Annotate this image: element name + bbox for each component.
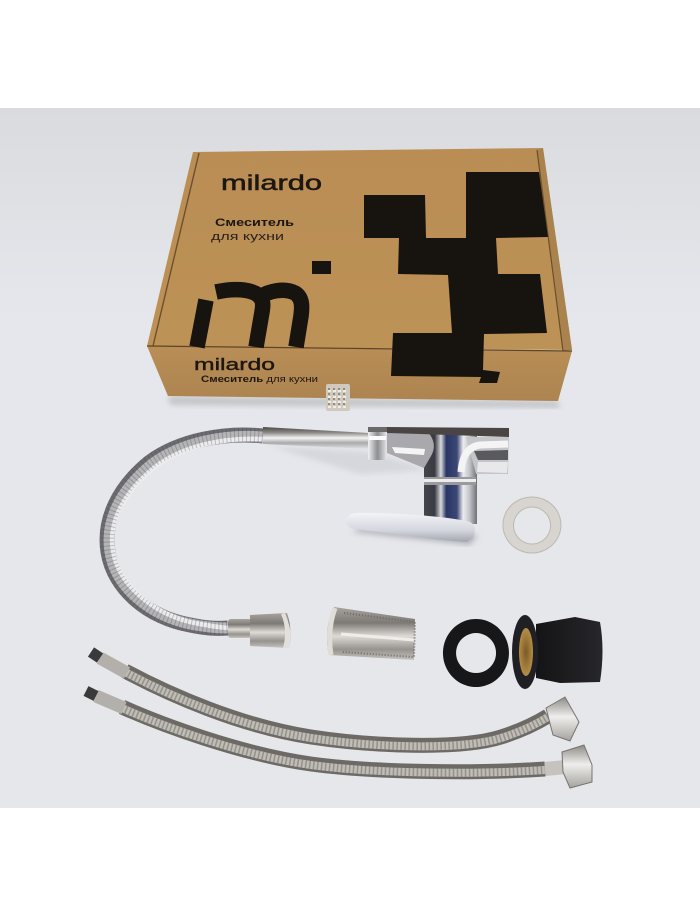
logo dot square: [312, 261, 331, 274]
metal washer: [503, 497, 561, 553]
upper braided hose: [91, 652, 548, 746]
box side flaps: [153, 153, 199, 346]
top bar: [387, 427, 509, 437]
front product title: Смеситель для кухни: [201, 374, 318, 385]
lower braided hose: [86, 691, 566, 773]
lower hex nut: [562, 745, 592, 788]
faucet column: [424, 434, 477, 524]
black plastic nut with flange: [512, 615, 602, 689]
small aerator mesh: [326, 384, 350, 411]
white curved reflection: [461, 444, 508, 472]
large m logo: [197, 290, 302, 347]
front brand name: milardo: [194, 355, 275, 374]
flexible hose: [107, 435, 263, 628]
braided hoses: [86, 652, 592, 788]
threaded tube: [327, 607, 415, 660]
photo background: [0, 108, 700, 808]
black pixel pattern: [364, 172, 548, 383]
hose head sprayer: [228, 613, 291, 648]
box shadow: [168, 396, 560, 408]
faucet with flexible hose: [107, 427, 509, 628]
top product title: Смеситель: [215, 217, 294, 229]
nut flange: [512, 615, 538, 689]
tube body: [327, 607, 415, 660]
right head: [466, 437, 509, 474]
swivel collar: [368, 427, 387, 460]
cardboard box: [147, 148, 572, 408]
top brand name: milardo: [221, 172, 322, 195]
box front face: [147, 346, 572, 401]
top product subtitle: для кухни: [211, 231, 284, 243]
faucet head and body: [387, 427, 509, 524]
brass insert: [519, 628, 533, 676]
left spout housing: [387, 430, 434, 468]
box top face: [147, 148, 572, 350]
spout tube: [263, 427, 369, 449]
nut body: [536, 617, 602, 683]
sprayer head: [250, 613, 291, 648]
upper hex nut: [546, 697, 579, 741]
faucet lever handle: [346, 513, 475, 542]
collar ring: [424, 477, 476, 485]
sprayer neck: [228, 619, 252, 638]
faucet shadows: [270, 446, 430, 474]
black rubber gasket: [443, 619, 509, 687]
